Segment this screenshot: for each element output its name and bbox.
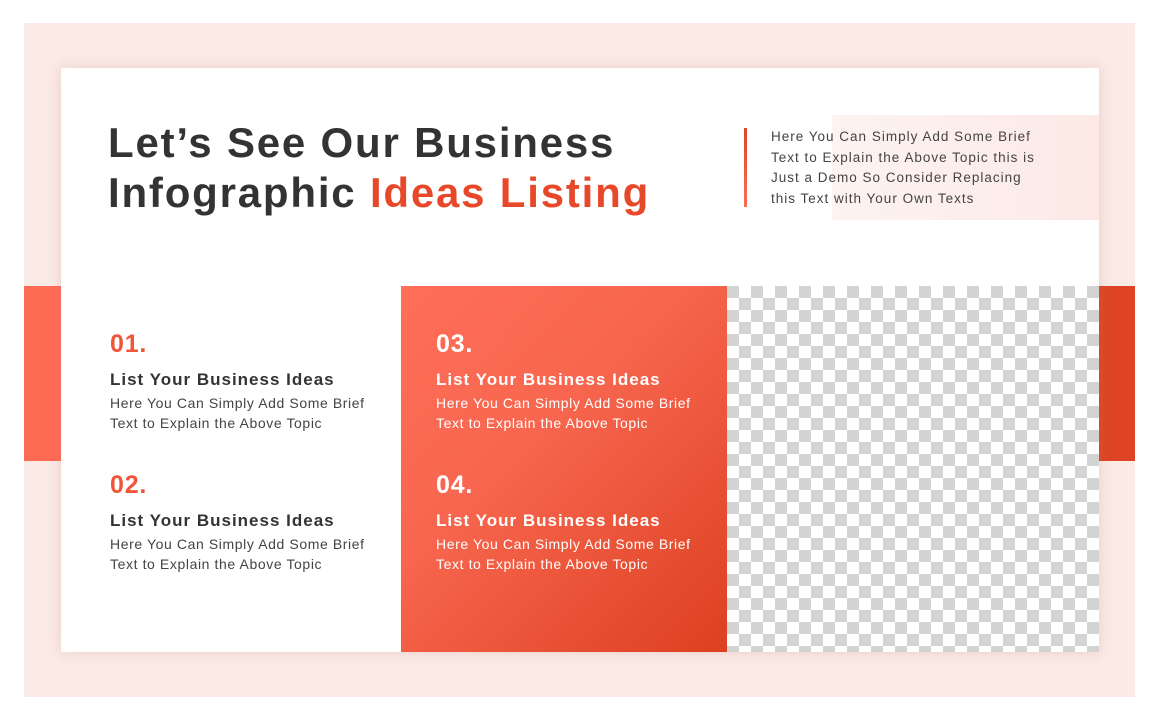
item 04: Here You Can Simply Add Some Brief (436, 536, 691, 552)
item 03 (436, 330, 691, 431)
orange panel (401, 286, 727, 652)
white card (61, 68, 1099, 652)
checkerboard image placeholder (727, 286, 1099, 652)
item 02: Text to Explain the Above Topic (110, 556, 322, 572)
left red band (24, 286, 64, 461)
item 02: Here You Can Simply Add Some Brief (110, 536, 365, 552)
intro text: Just a Demo So Consider Replacing (771, 170, 1022, 185)
item 04: Text to Explain the Above Topic (436, 556, 648, 572)
intro text: this Text with Your Own Texts (771, 191, 974, 206)
item 03: Here You Can Simply Add Some Brief (436, 395, 691, 411)
item 02: List Your Business Ideas (110, 511, 335, 530)
pink text backdrop (832, 115, 1099, 220)
accent bar (744, 128, 747, 207)
item 03: List Your Business Ideas (436, 370, 661, 389)
item 02: 02. (110, 471, 147, 499)
item 01 (110, 330, 365, 431)
intro text: Text to Explain the Above Topic this is (771, 150, 1035, 165)
item 02 (110, 471, 365, 572)
right red band (1096, 286, 1135, 461)
item 03: 03. (436, 330, 473, 358)
intro text: Here You Can Simply Add Some Brief (771, 129, 1031, 144)
item 01: List Your Business Ideas (110, 370, 335, 389)
title: Infographic Ideas Listing (108, 169, 650, 216)
item 01: Here You Can Simply Add Some Brief (110, 395, 365, 411)
item 04: 04. (436, 471, 473, 499)
title (108, 119, 650, 216)
title: Let’s See Our Business (108, 119, 615, 166)
item 01: Text to Explain the Above Topic (110, 415, 322, 431)
intro text (771, 129, 1035, 206)
item 04 (436, 471, 691, 572)
item 01: 01. (110, 330, 147, 358)
item 04: List Your Business Ideas (436, 511, 661, 530)
item 03: Text to Explain the Above Topic (436, 415, 648, 431)
